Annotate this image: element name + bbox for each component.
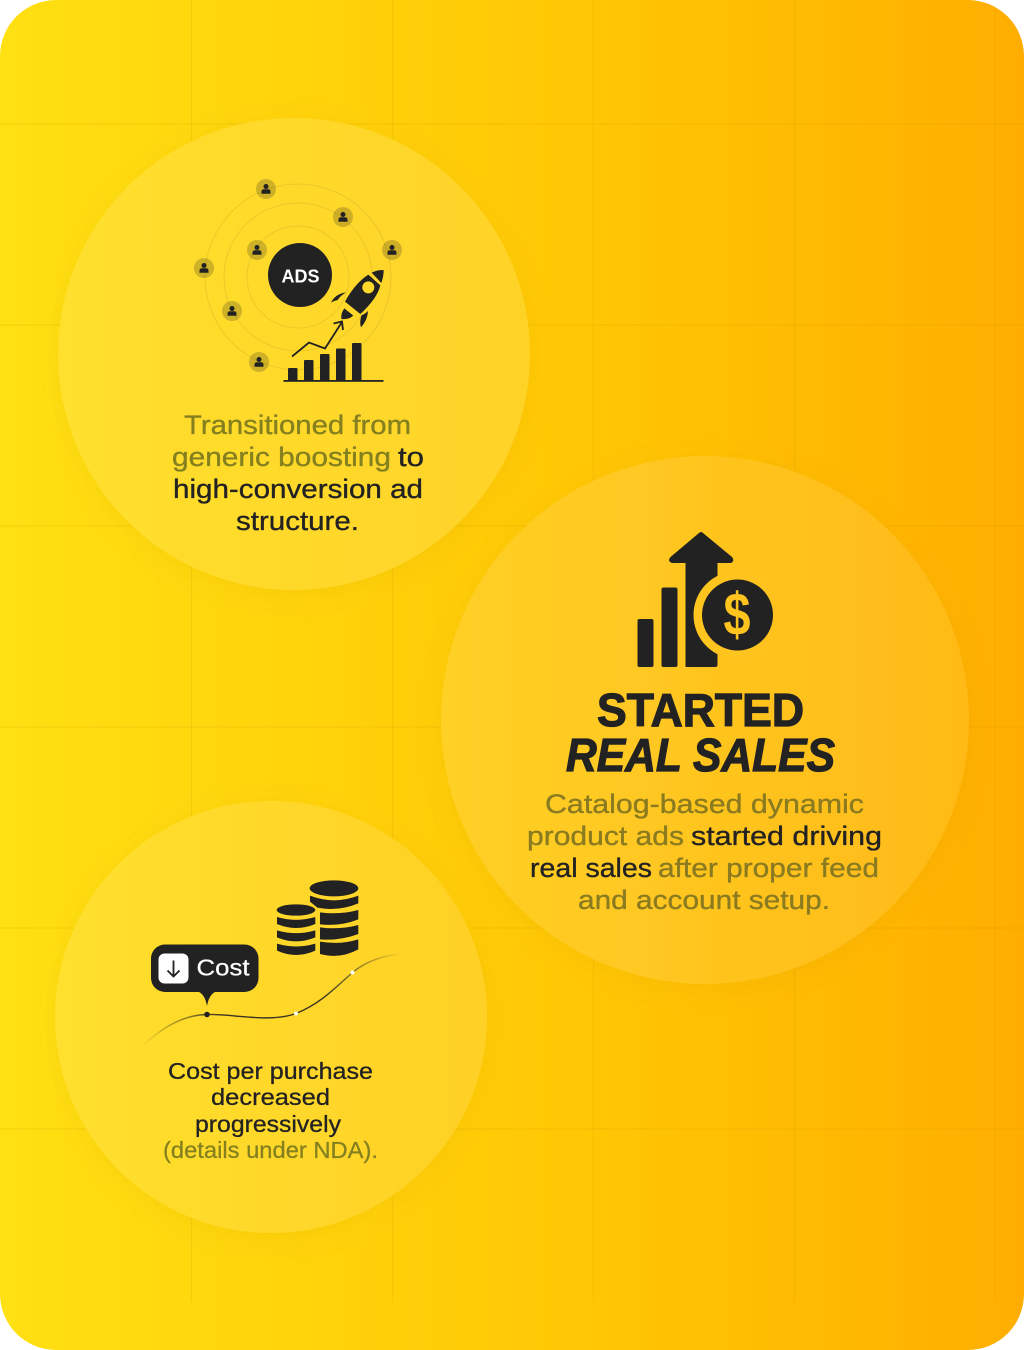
- text block: real sales: and account setup.: [578, 885, 830, 915]
- text block: real sales: Catalog-based dynamic: [545, 789, 864, 819]
- icon: ads orbit with rocket and growth chart: [194, 179, 402, 382]
- text block: ad structure: Transitioned from: [184, 410, 411, 440]
- icon: coin stacks: [277, 880, 358, 956]
- heading: [566, 684, 835, 781]
- callout: cost: Cost: [196, 954, 250, 980]
- text block: ad structure: generic boosting: [172, 442, 391, 472]
- text block: cost: decreased: [211, 1084, 330, 1110]
- chart: cost curve: [141, 954, 402, 1047]
- text block: real sales: after proper feed: [658, 853, 879, 883]
- icon: ads orbit with rocket and growth chart: ADS: [282, 266, 320, 286]
- heading: STARTED: [597, 684, 804, 736]
- panel: cost: [55, 801, 487, 1233]
- callout: cost: [151, 944, 258, 1006]
- text block: real sales: [527, 789, 882, 915]
- text block: ad structure: high-conversion ad: [173, 474, 423, 504]
- text block: ad structure: [172, 410, 424, 536]
- text block: cost: (details under NDA).: [163, 1137, 378, 1163]
- heading: REAL SALES: [566, 729, 835, 781]
- text block: ad structure: structure.: [236, 506, 359, 536]
- icon: chart with arrow and dollar coin: $: [724, 581, 750, 648]
- icon: rocket: [331, 270, 384, 327]
- text block: real sales: real sales: [530, 853, 652, 883]
- text block: cost: progressively: [195, 1111, 341, 1137]
- icon: chart with arrow and dollar coin: [638, 532, 782, 667]
- text block: real sales: started driving: [691, 821, 882, 851]
- panel: real sales: [441, 456, 969, 984]
- text block: cost: [163, 1058, 378, 1163]
- panel: ad structure: [58, 118, 530, 590]
- text block: real sales: product ads: [527, 821, 684, 851]
- text block: cost: Cost per purchase: [168, 1058, 373, 1084]
- bar chart: [284, 322, 384, 382]
- text block: ad structure: to: [398, 442, 424, 472]
